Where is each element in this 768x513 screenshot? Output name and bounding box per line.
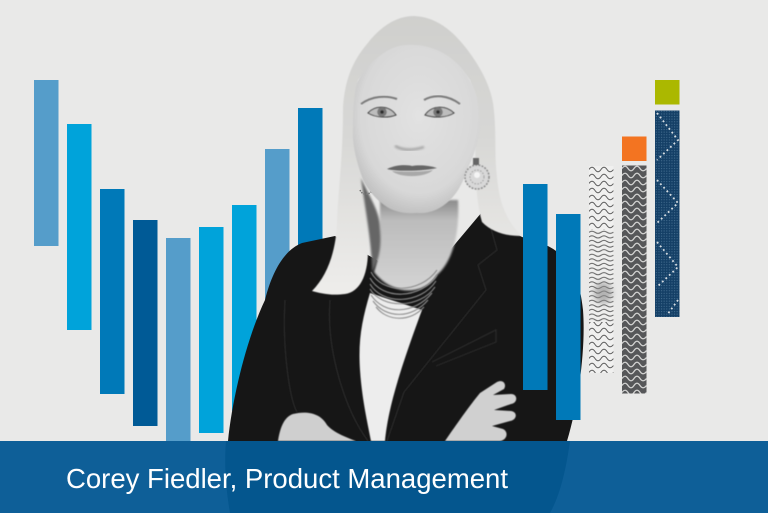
- blue bar A: [523, 184, 548, 390]
- orange square: [622, 136, 646, 161]
- hair shadow behind neck: [361, 178, 381, 272]
- left eye: [368, 107, 396, 117]
- banner base: [0, 441, 768, 513]
- bar 4: [133, 220, 158, 426]
- bar 3: [100, 189, 124, 394]
- patterned bars: [589, 80, 680, 394]
- right hand: [445, 381, 516, 441]
- jacket: [228, 212, 584, 441]
- hair: [312, 16, 522, 295]
- left eyebrow: [361, 97, 397, 104]
- dotted zigzag: [657, 113, 678, 315]
- blue bar B: [556, 214, 580, 420]
- moire shading: [594, 282, 612, 304]
- portrait photo: [228, 16, 584, 441]
- bar 7: [232, 205, 256, 411]
- right eyebrow: [424, 96, 460, 104]
- bar 1: [34, 80, 58, 246]
- caption banner: [0, 441, 768, 513]
- right eye: [425, 107, 454, 117]
- bar 2: [67, 124, 92, 330]
- lower lip: [392, 170, 433, 176]
- lime square: [655, 80, 680, 104]
- navy dotted bar: [655, 110, 680, 317]
- necklace: [370, 270, 437, 318]
- right blue bars: [523, 184, 580, 420]
- translucent figure in banner: [225, 441, 570, 513]
- dense wave section: [589, 230, 614, 322]
- bar 5: [166, 238, 190, 442]
- earring left: [360, 190, 371, 194]
- earring right: [465, 158, 489, 189]
- nose: [395, 146, 424, 150]
- caption text: Corey Fiedler, Product Management: [66, 463, 508, 494]
- left bar group: [34, 80, 322, 442]
- neck: [374, 200, 458, 290]
- dark wave bar: [622, 166, 646, 394]
- upper lip: [387, 165, 437, 171]
- bar 6: [199, 227, 224, 433]
- left hand: [278, 413, 356, 441]
- jacket lapel shading: [284, 225, 497, 441]
- bar 9: [298, 108, 322, 314]
- light wave bar: [589, 166, 614, 373]
- bar 8: [265, 149, 290, 355]
- face: [353, 45, 480, 213]
- white shirt: [359, 293, 422, 441]
